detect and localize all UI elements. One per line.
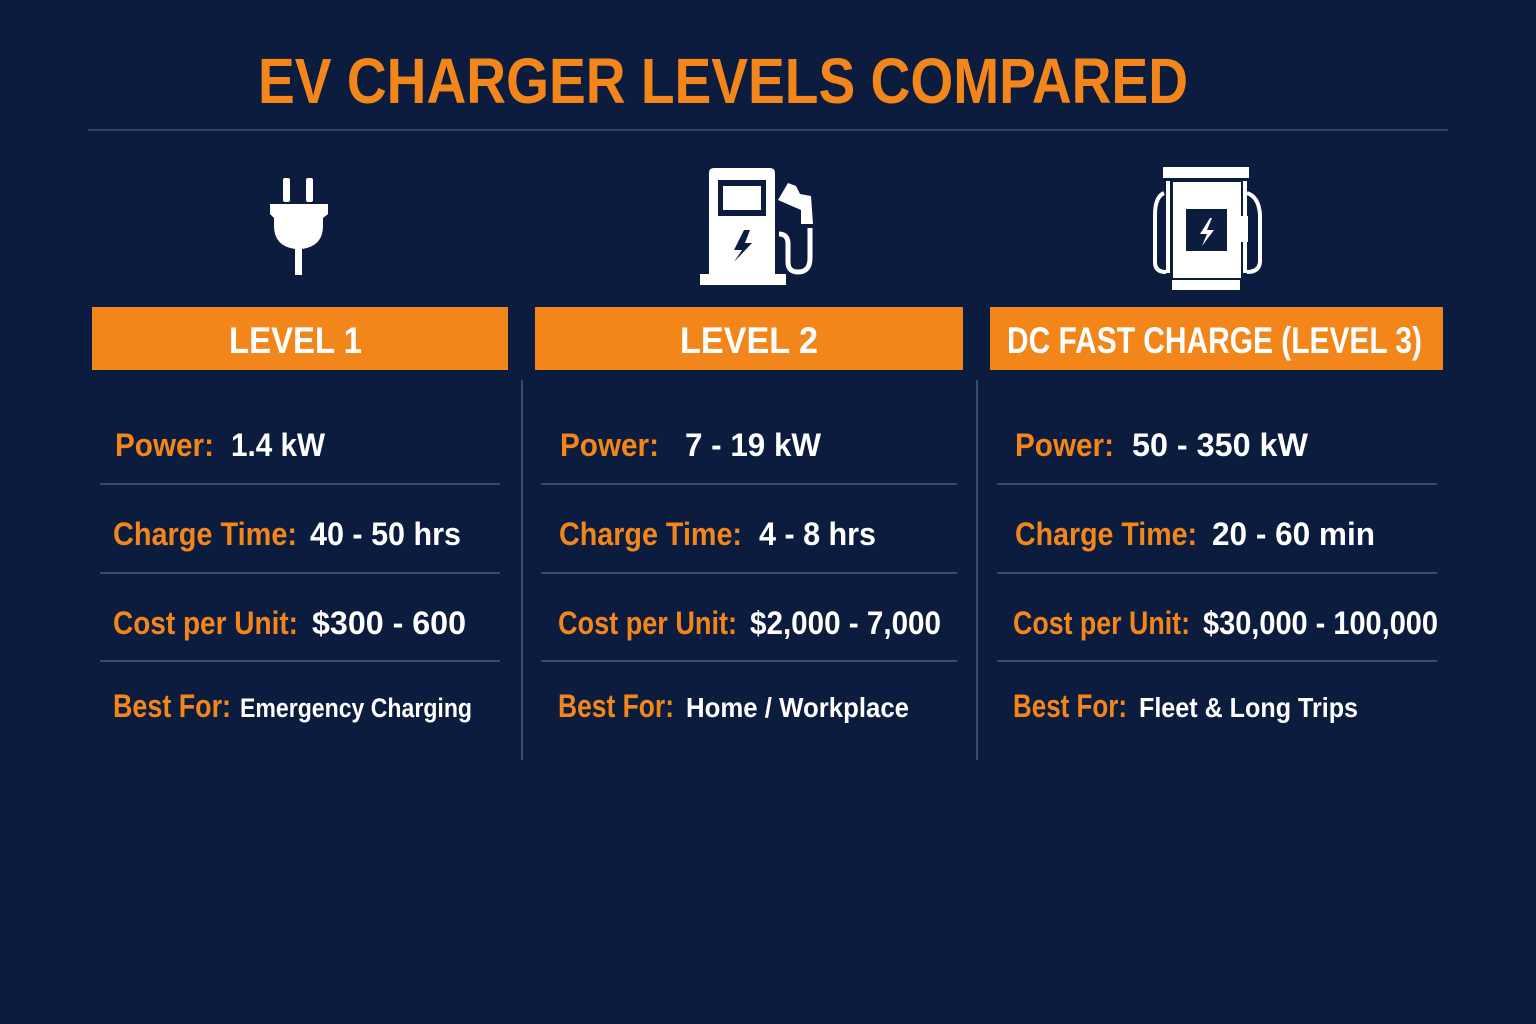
panel: dc fast details: 20 - 60 min <box>1212 516 1375 552</box>
header: dc fast: DC FAST CHARGE (LEVEL 3) <box>1007 320 1422 361</box>
panel: level 1 details: Emergency Charging <box>240 693 472 723</box>
panel: level 2 details: Charge Time: <box>559 516 742 552</box>
panel: dc fast details: $30,000 - 100,000 <box>1203 605 1438 641</box>
panel: level 2 details: Power: <box>560 427 659 463</box>
panel: level 2 details: 4 - 8 hrs <box>759 516 876 552</box>
panel: level 1 details: Cost per Unit: <box>113 605 298 641</box>
panel: level 2 details: 7 - 19 kW <box>685 427 822 463</box>
header: level 1 <box>92 307 508 370</box>
panel: level 2 details: Best For: <box>558 688 674 724</box>
icon: level 2 pump <box>700 168 813 285</box>
panel: level 1 details: $300 - 600 <box>312 605 466 641</box>
panel: level 2 details: Home / Workplace <box>686 692 909 723</box>
panel: level 2 details: $2,000 - 7,000 <box>750 605 941 641</box>
panel: level 1 details <box>113 427 472 724</box>
header: dc fast <box>990 307 1443 370</box>
panel: level 1 details: Best For: <box>113 688 231 724</box>
panel: level 1 details: Charge Time: <box>113 516 297 552</box>
icon: dc fast charger <box>1155 167 1260 290</box>
panel: level 2 details <box>558 427 941 724</box>
panel: dc fast details: Cost per Unit: <box>1013 605 1190 641</box>
panel: dc fast details: Charge Time: <box>1015 516 1197 552</box>
panel: level 1 details: 1.4 kW <box>231 427 326 463</box>
panel: dc fast details <box>1013 427 1438 724</box>
panel: level 1 details: Power: <box>115 427 214 463</box>
icon: plug <box>270 178 328 275</box>
panel: dc fast details: Fleet & Long Trips <box>1139 692 1358 723</box>
header: level 2 <box>535 307 963 370</box>
panel: level 2 details: Cost per Unit: <box>558 605 737 641</box>
panel: dc fast details: 50 - 350 kW <box>1132 427 1309 463</box>
header: level 1: LEVEL 1 <box>229 320 362 361</box>
panel: dc fast details: Power: <box>1015 427 1114 463</box>
panel: level 1 details: 40 - 50 hrs <box>310 516 461 552</box>
header: level 2: LEVEL 2 <box>680 320 818 361</box>
panel: dc fast details: Best For: <box>1013 688 1127 724</box>
title: EV CHARGER LEVELS COMPARED <box>258 45 1188 117</box>
